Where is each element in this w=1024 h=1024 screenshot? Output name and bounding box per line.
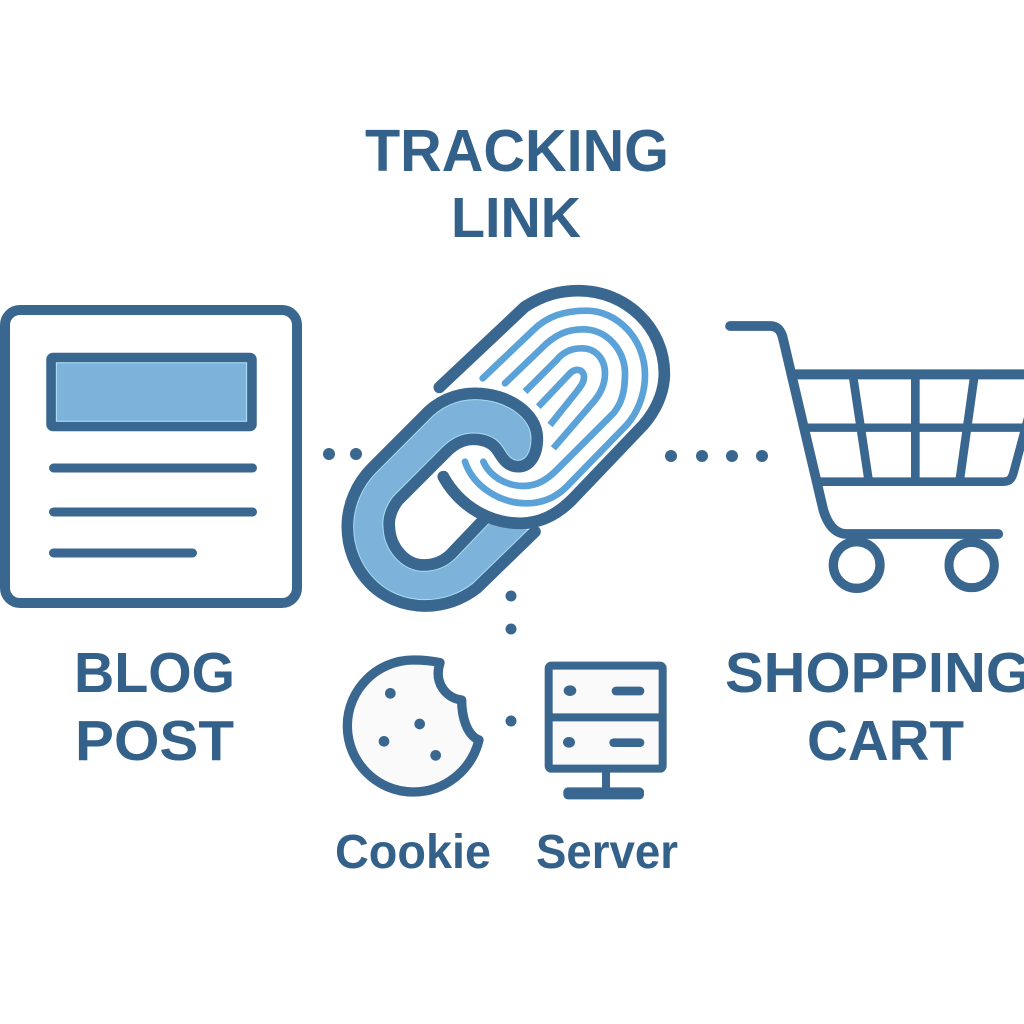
icon: blog post — [5, 310, 297, 603]
label: blog post: POST — [75, 709, 234, 773]
upper link front edge — [443, 477, 572, 523]
lower link — [347, 393, 537, 606]
title — [365, 118, 669, 250]
icon: shopping cart — [730, 326, 1024, 588]
title: TRACKING — [365, 118, 669, 184]
connector dots: blog to link — [323, 448, 362, 460]
label: server: Server — [536, 826, 678, 879]
upper link — [439, 291, 664, 523]
label: shopping cart: CART — [807, 709, 964, 773]
connector dots: link to cart — [665, 450, 768, 462]
connector dots: link to cookie and server — [506, 590, 516, 726]
label: blog post: BLOG — [74, 641, 235, 705]
fingerprint — [465, 311, 645, 503]
title: LINK — [451, 186, 581, 250]
label: cookie: Cookie — [335, 826, 491, 879]
label: shopping cart — [725, 641, 1024, 773]
icon: server — [549, 666, 663, 799]
label: blog post — [74, 641, 235, 773]
label: shopping cart: SHOPPING — [725, 641, 1024, 705]
icon: chain link with fingerprint — [347, 291, 664, 606]
icon: cookie — [347, 660, 479, 792]
